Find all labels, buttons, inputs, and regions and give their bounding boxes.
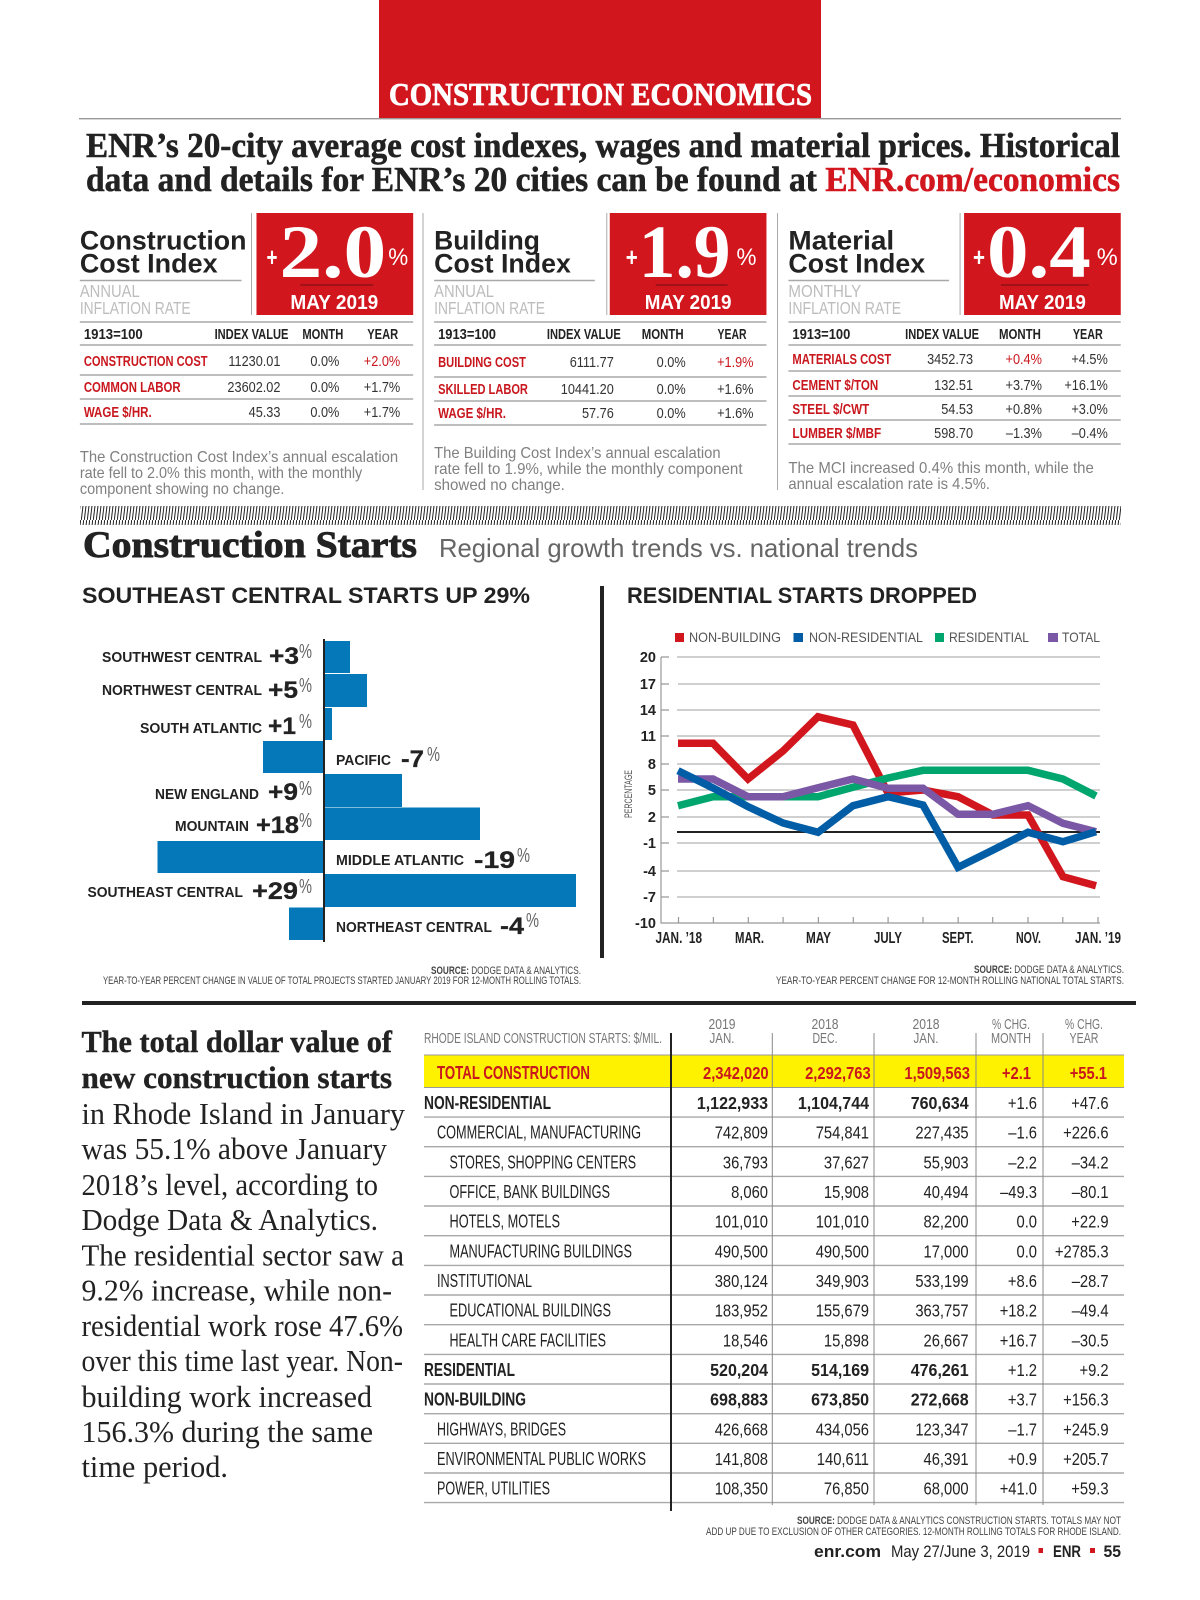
table: rhode island construction starts: +245.9 [1063,1420,1109,1440]
table: rhode island construction starts [424,1016,1124,1511]
panel: material cost index: YEAR [1073,326,1103,343]
panel: material cost index: –0.4% [1072,424,1108,441]
table: rhode island construction starts: 15,898 [824,1331,869,1351]
panel: building cost index: SKILLED LABOR [438,381,528,398]
table: rhode island construction starts: 742,809 [715,1123,768,1143]
chart: regional bar chart: % [299,778,312,800]
panel: material cost index: INFLATION RATE [788,298,901,318]
panel: material cost index: 598.70 [934,424,973,441]
table: rhode island construction starts: +2785.3 [1055,1242,1109,1262]
table: rhode island construction starts: 40,494 [924,1183,969,1202]
chart: regional bar chart: % [299,641,312,663]
chart: regional bar chart: -4 [500,913,525,940]
chart: regional bar chart: +18 [256,812,299,839]
panel: building cost index: Cost Index [434,248,571,279]
panel: building cost index: 6111.77 [570,353,614,370]
chart: national trends line chart: -7 [643,890,656,906]
panel: building cost index: INDEX VALUE [547,326,621,343]
panel: building cost index: 10441.20 [561,380,614,397]
table: rhode island construction starts: POWER, UTILITIES [437,1479,550,1499]
panel: material cost index: MAY 2019 [999,292,1086,314]
panel: construction cost index: WAGE $/HR. [84,404,152,421]
table: rhode island construction starts: –28.7 [1072,1272,1109,1291]
chart: regional bar chart: % [299,675,312,697]
panel: material cost index [788,211,1121,493]
chart: national trends line chart: NOV. [1016,930,1041,947]
panel: building cost index: showed no change. [434,477,565,494]
table: rhode island construction starts: RHODE ISLAND CONSTRUCTION STARTS: $/MIL. [424,1030,662,1047]
panel: construction cost index: MAY 2019 [290,292,378,314]
text block: rhode island summary: new construction starts [82,1060,392,1095]
chart: regional bar chart: % [299,711,312,733]
table: rhode island construction starts: –49.4 [1072,1301,1109,1321]
table: rhode island construction starts: MONTH [991,1030,1031,1047]
panel: construction cost index: 45.33 [249,403,281,420]
chart: regional bar chart: % [427,744,440,766]
chart: national trends line chart: SOURCE: DODGE DATA & ANALYTICS. [974,964,1124,976]
panel: building cost index: 1.9 [639,211,731,294]
chart: regional bar chart: NEW ENGLAND [155,787,259,803]
chart: national trends line chart: -1 [643,836,656,852]
panel: material cost index: –1.3% [1006,424,1042,441]
text block: rhode island summary: 9.2% increase, while non- [82,1272,392,1308]
panel: material cost index: +0.4% [1006,350,1042,367]
text block: rhode island summary: was 55.1% above January [82,1131,387,1166]
panel: construction cost index: 2.0 [279,211,386,294]
table: rhode island construction starts: 754,841 [816,1123,869,1143]
panel: material cost index: MONTH [999,326,1041,343]
table: rhode island construction starts: –1.6 [1008,1123,1037,1143]
table: rhode island construction starts: MANUFACTURING BUILDINGS [450,1241,632,1261]
table: rhode island construction starts: 15,908 [824,1183,869,1202]
panel: building cost index: +1.9% [717,353,753,370]
chart: national trends line chart: MAR. [735,930,764,947]
panel: construction cost index: +1.7% [364,403,400,420]
table: rhode island construction starts: 68,000 [924,1479,969,1499]
panel: material cost index: 54.53 [941,400,973,417]
table: rhode island construction starts: 2,292,763 [805,1064,871,1083]
table: rhode island construction starts: +16.7 [1000,1331,1037,1351]
table: rhode island construction starts: 0.0 [1017,1212,1037,1232]
table: rhode island construction starts: –49.3 [1000,1183,1037,1202]
chart: regional bar chart: -19 [474,847,515,874]
panel: building cost index: INFLATION RATE [434,298,545,318]
panel: building cost index: 0.0% [657,353,686,370]
chart: national trends line chart: 17 [640,677,656,693]
table: rhode island construction starts: 37,627 [824,1153,869,1173]
table: rhode island construction starts: +41.0 [1000,1479,1037,1499]
table: rhode island construction starts: TOTAL CONSTRUCTION [437,1063,590,1083]
panel: material cost index: The MCI increased 0.4% this month, while the [788,460,1094,477]
panel: building cost index: ANNUAL [434,281,494,301]
panel: building cost index: BUILDING COST [438,354,526,371]
panel: material cost index: INDEX VALUE [905,326,979,343]
table: rhode island construction starts: +2.1 [1002,1064,1031,1083]
panel: material cost index: 0.4 [987,211,1091,294]
table: rhode island construction starts: 760,634 [911,1093,969,1113]
table: rhode island construction starts: 183,952 [715,1301,768,1321]
table: rhode island construction starts: INSTITUTIONAL [437,1271,532,1291]
text block: rhode island summary [82,1024,405,1484]
panel: material cost index: +4.5% [1071,350,1108,367]
chart: national trends line chart [623,583,1124,987]
table: rhode island construction starts: 26,667 [924,1331,969,1351]
panel: building cost index: Building [434,225,540,256]
table: rhode island construction starts: +0.9 [1008,1450,1037,1469]
table: rhode island construction starts: 123,347 [915,1420,969,1440]
table: rhode island construction starts: 363,757 [915,1301,969,1321]
table: rhode island construction starts: +8.6 [1008,1272,1037,1291]
panel: building cost index: % [737,244,756,271]
table: rhode island construction starts: 673,850 [811,1390,869,1410]
panel: construction cost index: The Construction Cost Index’s annual escalation [80,449,398,466]
panel: construction cost index: YEAR [367,326,398,343]
panel: building cost index [434,211,766,494]
table: rhode island construction starts: +3.7 [1008,1390,1037,1410]
chart: national trends line chart: RESIDENTIAL STARTS DROPPED [627,583,977,608]
table: rhode island construction starts: +59.3 [1071,1479,1109,1499]
table: rhode island construction starts: NON-BUILDING [424,1390,526,1410]
panel: construction cost index: component showing no change. [80,481,284,498]
panel: material cost index: 1913=100 [792,326,850,343]
table: rhode island construction starts: +226.6 [1063,1123,1109,1143]
panel: building cost index: 57.76 [582,404,614,421]
table: rhode island construction starts: 490,500 [715,1242,768,1262]
panel: building cost index: 0.0% [657,404,686,421]
panel: construction cost index: INDEX VALUE [215,326,288,343]
chart: regional bar chart: SOUTHEAST CENTRAL STARTS UP 29% [82,583,530,608]
chart: national trends line chart: 14 [640,703,656,719]
table: rhode island construction starts: 140,611 [817,1450,869,1469]
headline [86,126,1120,199]
table: rhode island construction starts: STORES, SHOPPING CENTERS [450,1152,636,1172]
table: rhode island construction starts: EDUCATIONAL BUILDINGS [450,1301,611,1321]
panel: construction cost index: 0.0% [310,378,339,395]
table: rhode island construction starts: JAN. [710,1030,734,1047]
table: rhode island construction starts: HEALTH CARE FACILITIES [450,1330,606,1350]
panel: construction cost index: 0.0% [310,403,339,420]
panel: construction cost index: +1.7% [364,378,400,395]
panel: material cost index: Material [788,225,894,256]
chart: national trends line chart: SEPT. [942,930,974,947]
chart legend: NON-RESIDENTIAL [809,629,923,645]
chart: regional bar chart [82,583,581,987]
panel: building cost index: +1.6% [717,380,753,397]
chart: national trends line chart: -4 [643,864,656,880]
text block: rhode island summary: 156.3% during the same [82,1414,373,1449]
text block: rhode island summary: Dodge Data & Analytics. [82,1202,378,1237]
table: rhode island construction starts: 155,679 [816,1301,869,1321]
panel: building cost index: The Building Cost Index’s annual escalation [434,445,721,462]
chart: national trends line chart: 8 [648,757,656,773]
panel: building cost index: YEAR [718,326,747,343]
chart: national trends line chart: MAY [806,930,831,947]
headline: ENR’s 20-city average cost indexes, wages and material prices. Historical [86,126,1120,165]
panel: material cost index: MATERIALS COST [792,351,891,368]
table: rhode island construction starts: 2,342,020 [703,1064,769,1083]
chart: regional bar chart: SOUTHEAST CENTRAL [88,885,243,901]
panel: construction cost index: Cost Index [80,248,218,279]
table: rhode island construction starts: +55.1 [1070,1064,1107,1083]
table: rhode island construction starts: 8,060 [731,1183,768,1202]
heading: construction starts: Construction Starts [83,525,417,566]
table: rhode island construction starts: COMMERCIAL, MANUFACTURING [437,1123,641,1143]
chart: regional bar chart: -7 [401,746,424,773]
chart: regional bar chart: % [526,910,539,932]
panel: material cost index: +16.1% [1064,376,1108,393]
section banner: construction economics [79,0,1121,119]
panel: construction cost index: 0.0% [310,352,339,369]
chart: national trends line chart: 11 [641,729,656,745]
table: rhode island construction starts: 1,104,744 [798,1093,869,1113]
table: rhode island construction starts: % CHG. [1065,1016,1103,1033]
panel: material cost index: MONTHLY [788,281,861,301]
table: rhode island construction starts: 434,056 [816,1420,869,1440]
table: rhode island construction starts: 476,261 [911,1360,969,1380]
chart legend: NON-BUILDING [689,629,781,645]
panel: construction cost index: 23602.02 [227,378,281,395]
panel: building cost index: + [626,242,638,272]
panel: material cost index: Cost Index [788,248,925,279]
panel: building cost index: +1.6% [717,404,753,421]
panel: material cost index: CEMENT $/TON [792,377,878,394]
table: rhode island construction starts: +47.6 [1071,1094,1109,1113]
text block: rhode island summary: building work increased [82,1379,372,1414]
panel: construction cost index: +2.0% [364,352,400,369]
table: rhode island construction starts: 520,204 [710,1360,768,1380]
table: rhode island construction starts: 18,546 [723,1331,768,1351]
table: rhode island construction starts: NON-RESIDENTIAL [424,1093,551,1113]
table: rhode island construction starts: 514,169 [811,1360,869,1380]
table: rhode island construction starts: 141,808 [715,1450,768,1469]
panel: construction cost index: 11230.01 [228,352,281,369]
chart: national trends line chart: 2 [648,810,656,826]
panel: building cost index: MAY 2019 [645,292,732,314]
table: rhode island construction starts: +9.2 [1079,1361,1109,1380]
table: rhode island construction starts: +18.2 [1000,1301,1037,1321]
panel: construction cost index: ANNUAL [80,281,140,301]
text block: rhode island summary: in Rhode Island in January [82,1096,405,1131]
chart legend: TOTAL [1062,629,1100,645]
table: rhode island construction starts: 426,668 [715,1420,768,1440]
table: rhode island construction starts: 380,124 [715,1272,768,1291]
chart: regional bar chart: % [299,876,312,898]
chart: regional bar chart: % [299,810,312,832]
panel: building cost index: WAGE $/HR. [438,405,506,422]
panel: building cost index: rate fell to 1.9%, while the monthly component [434,461,743,478]
chart: national trends line chart: JULY [874,930,902,947]
chart: regional bar chart: SOUTHWEST CENTRAL [102,650,262,666]
chart: regional bar chart: +5 [268,677,298,704]
chart: national trends line chart: -10 [635,916,656,932]
table: rhode island construction starts: 272,668 [911,1390,969,1410]
table: rhode island construction starts: 349,903 [816,1272,869,1291]
chart: regional bar chart: MIDDLE ATLANTIC [336,853,465,869]
text block: rhode island summary: over this time last year. Non- [82,1343,403,1378]
chart: regional bar chart: SOURCE: DODGE DATA & ANALYTICS. [431,965,581,977]
panel: construction cost index [80,211,413,498]
table: rhode island construction starts: 0.0 [1017,1242,1037,1262]
table: rhode island construction starts: –2.2 [1008,1153,1037,1173]
table: rhode island construction starts: DEC. [812,1030,838,1047]
table: rhode island construction starts: +1.6 [1008,1094,1037,1113]
table: rhode island construction starts: % CHG. [992,1016,1030,1033]
panel: material cost index: + [973,242,985,272]
heading: construction starts [83,525,918,566]
table: rhode island construction starts: 2018 [812,1016,838,1033]
headline: data and details for ENR’s 20 cities can be found at ENR.com/economics [86,160,1120,199]
chart: regional bar chart: NORTHEAST CENTRAL [336,920,492,936]
panel: construction cost index: Construction [80,225,247,256]
table: rhode island construction starts: 698,883 [710,1390,768,1410]
page footer: ENR [1053,1542,1081,1561]
page footer: enr.com [814,1542,881,1561]
chart: national trends line chart: JAN. ’19 [1075,930,1121,947]
chart legend: RESIDENTIAL [949,629,1029,645]
text block: rhode island summary: 2018’s level, according to [82,1167,378,1202]
table: rhode island construction starts: 101,010 [816,1212,869,1232]
table: rhode island construction starts: YEAR [1070,1030,1099,1047]
chart: national trends line chart: 5 [648,783,656,799]
chart: regional bar chart: +1 [268,713,296,740]
section banner: construction economics: CONSTRUCTION ECONOMICS [389,76,812,112]
text block: rhode island summary: The total dollar value of [82,1024,393,1059]
panel: material cost index: STEEL $/CWT [792,401,869,418]
chart: regional bar chart: PACIFIC [336,753,391,769]
panel: building cost index: 0.0% [657,380,686,397]
text block: rhode island summary: time period. [82,1449,228,1484]
panel: construction cost index: rate fell to 2.0% this month, with the monthly [80,465,362,482]
table: rhode island construction starts: 46,391 [924,1450,969,1469]
panel: construction cost index: + [266,242,277,272]
table: rhode island construction starts: 101,010 [715,1212,768,1232]
panel: material cost index: +3.0% [1071,400,1108,417]
table: rhode island construction starts: ENVIRONMENTAL PUBLIC WORKS [437,1449,646,1469]
table: rhode island construction starts: +22.9 [1071,1212,1109,1232]
chart: regional bar chart: YEAR-TO-YEAR PERCENT CHANGE IN VALUE OF TOTAL PROJECTS STARTED JANUARY 2019 FOR 12-MONTH ROLLING TOTALS. [103,975,581,987]
chart: regional bar chart: +3 [269,643,299,670]
chart: regional bar chart: MOUNTAIN [175,819,249,835]
chart: regional bar chart: SOUTH ATLANTIC [140,721,263,737]
table: rhode island construction starts: 2018 [912,1016,940,1033]
table: rhode island construction starts: 227,435 [915,1123,969,1143]
table: rhode island construction starts: +1.2 [1008,1361,1037,1380]
panel: material cost index: 3452.73 [927,350,973,367]
panel: construction cost index: INFLATION RATE [80,298,191,318]
panel: construction cost index: MONTH [302,326,343,343]
panel: material cost index: LUMBER $/MBF [792,425,881,442]
page footer [814,1542,1121,1561]
table: rhode island construction starts: 108,350 [715,1479,768,1499]
panel: material cost index: +3.7% [1006,376,1042,393]
table: rhode island construction starts: –30.5 [1072,1331,1109,1351]
table source note [706,1515,1121,1538]
panel: material cost index: 132.51 [934,376,973,393]
chart: national trends line chart: JAN. ’18 [656,930,702,947]
page footer: 55 [1104,1542,1121,1561]
chart legend [675,629,1100,645]
table: rhode island construction starts: 17,000 [924,1242,969,1262]
chart: regional bar chart: NORTHWEST CENTRAL [102,683,262,699]
panel: building cost index: MONTH [642,326,684,343]
table: rhode island construction starts: RESIDENTIAL [424,1360,515,1380]
chart: regional bar chart: +9 [268,779,298,806]
table: rhode island construction starts: 2019 [708,1016,736,1033]
table: rhode island construction starts: –34.2 [1072,1153,1109,1173]
panel: building cost index: 1913=100 [438,326,496,343]
table: rhode island construction starts: 490,500 [816,1242,869,1262]
heading: construction starts: Regional growth trends vs. national trends [439,533,918,563]
panel: material cost index: +0.8% [1006,400,1042,417]
table: rhode island construction starts: HOTELS, MOTELS [450,1212,560,1232]
text block: rhode island summary: The residential sector saw a [82,1238,404,1272]
table: rhode island construction starts: 1,122,933 [697,1093,768,1113]
panel: construction cost index: CONSTRUCTION COST [84,353,208,370]
table: rhode island construction starts: 1,509,563 [904,1064,970,1083]
table: rhode island construction starts: +156.3 [1063,1390,1109,1410]
table: rhode island construction starts: 76,850 [824,1479,869,1499]
panel: construction cost index: % [388,244,408,271]
table: rhode island construction starts: 55,903 [924,1153,969,1173]
table: rhode island construction starts: HIGHWAYS, BRIDGES [437,1419,566,1439]
table: rhode island construction starts: OFFICE, BANK BUILDINGS [450,1182,610,1202]
panel: construction cost index: 1913=100 [84,326,143,343]
table: rhode island construction starts: 36,793 [723,1153,768,1173]
table: rhode island construction starts: –1.7 [1008,1420,1037,1440]
chart: national trends line chart: PERCENTAGE [623,770,635,818]
table: rhode island construction starts: 533,199 [915,1272,969,1291]
table: rhode island construction starts: +205.7 [1063,1450,1109,1469]
chart: regional bar chart: % [517,845,530,867]
page footer: May 27/June 3, 2019 [891,1542,1030,1561]
table: rhode island construction starts: JAN. [914,1030,938,1047]
chart: national trends line chart: 20 [640,650,656,666]
chart: regional bar chart: +29 [252,878,298,905]
panel: material cost index: annual escalation rate is 4.5%. [788,476,990,493]
panel: material cost index: % [1097,244,1118,271]
table: rhode island construction starts: 82,200 [924,1212,969,1232]
text block: rhode island summary: residential work rose 47.6% [82,1308,403,1343]
panel: construction cost index: COMMON LABOR [84,379,181,396]
table: rhode island construction starts: –80.1 [1072,1183,1109,1202]
